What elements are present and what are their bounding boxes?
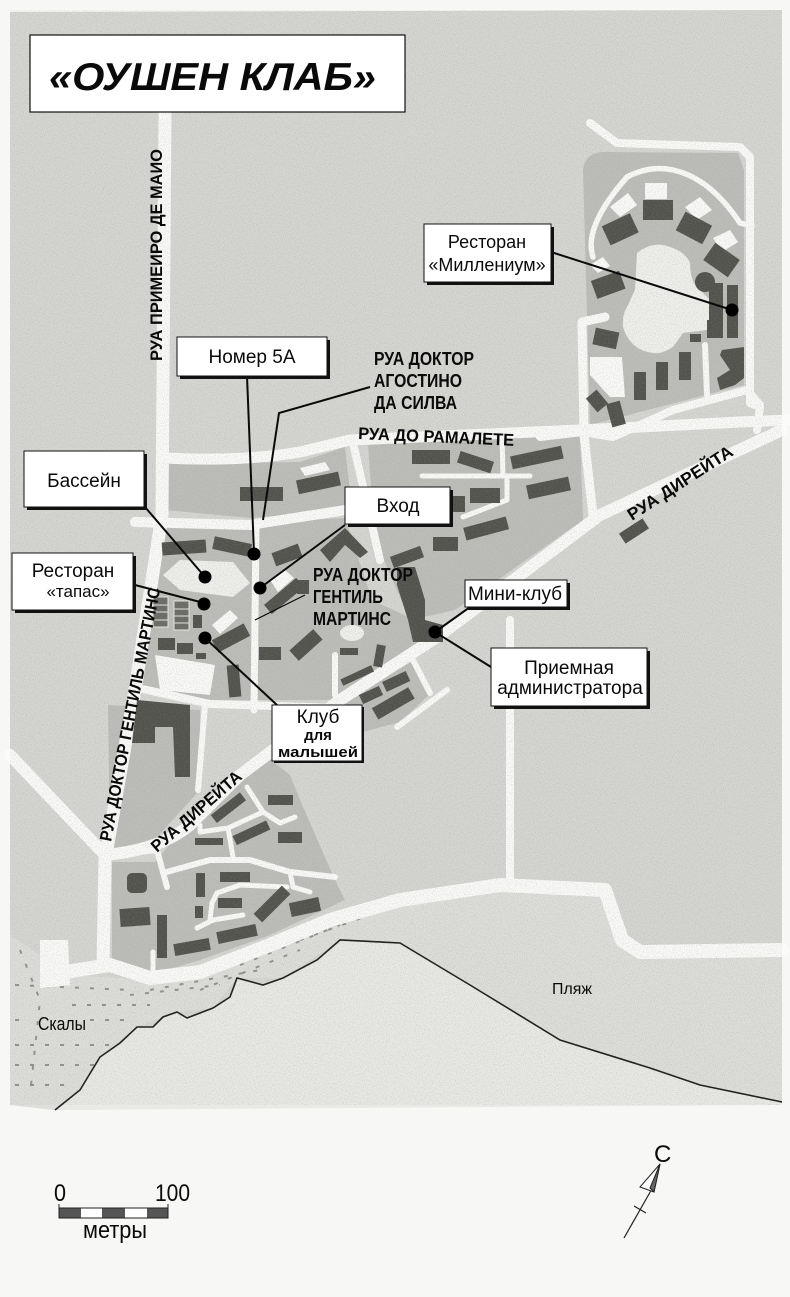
scale bar [54,1180,190,1244]
street: Rua Direita upper: РУА ДИРЕЙТА [624,442,736,524]
street labels [96,149,736,856]
street: Rua Doutor Gentil Martins [313,565,413,629]
callout: reception [491,648,650,709]
street: Rua Direita lower: РУА ДИРЕЙТА [147,767,246,856]
sea [55,940,782,1110]
callout: entrance: Вход [377,496,419,517]
scale bar: 0 [54,1180,66,1207]
buildings: tapas grid [153,597,189,630]
street: Rua Doutor Agostino da Silva [374,349,474,413]
callout: kids club [272,705,364,763]
leader lines [135,252,732,705]
coastline [55,940,782,1110]
street: Rua Doutor Gentil Martins: МАРТИНС [313,609,391,629]
rock speckles [15,915,370,1095]
callout: tapas restaurant: Ресторан [32,561,114,582]
callout: kids club: Клуб [297,707,339,728]
buildings: central resort [132,472,386,777]
buildings: lower quarter [119,792,321,958]
street: Rua Doutor Gentil Martins: РУА ДОКТОР [313,565,413,585]
callout: pool: Бассейн [47,471,121,492]
callout: pool [24,451,147,510]
label: rocks: Скалы [38,1014,86,1034]
callout: Millennium restaurant [424,224,554,285]
street: Rua Doutor Agostino da Silva: АГОСТИНО [374,371,462,391]
beach [340,885,782,1102]
callout: reception: администратора [497,678,643,699]
callout: entrance [345,487,453,527]
pools [163,245,717,641]
street: Rua Doutor Gentil Martins: ГЕНТИЛЬ [313,587,383,607]
rocks [10,905,400,1110]
north arrow [624,1141,671,1238]
callout: room 5A [177,337,330,379]
callout: tapas restaurant: «тапас» [46,582,110,601]
street: Rua do Ramalete: РУА ДО РАМАЛЕТЕ [358,424,515,450]
callout: kids club: малышей [278,744,358,761]
title [30,35,405,112]
callout: Millennium restaurant: Ресторан [448,232,526,252]
street: Rua Doutor Agostino da Silva: ДА СИЛВА [374,393,457,413]
white plots [40,183,738,988]
title: «ОУШЕН КЛАБ» [49,56,376,99]
street: Rua Doutor Agostino da Silva: РУА ДОКТОР [374,349,474,369]
north arrow: С [654,1141,671,1168]
scale bar: 100 [155,1180,190,1207]
callout: tapas restaurant [12,553,136,613]
callout: mini club [465,580,570,610]
label: beach: Пляж [552,981,592,998]
street: Rua Primeiro de Maio: РУА ПРИМЕИРО ДЕ МАИО [147,149,166,361]
callout: mini club: Мини-клуб [468,584,562,605]
callout: Millennium restaurant: «Миллениум» [428,255,546,275]
callout: reception: Приемная [524,658,614,679]
callout: kids club: для [304,727,332,744]
building blocks [108,152,744,975]
roads [10,112,790,978]
buildings [119,200,744,958]
street: Rua Doutor Gentil Martins vertical: РУА ДОКТОР ГЕНТИЛЬ МАРТИНС [96,586,164,843]
callout: room 5A: Номер 5А [208,347,296,368]
location dots [198,304,738,644]
scale bar: метры [83,1217,147,1244]
buildings: Ramalete quarter [359,446,649,720]
buildings: Millennium complex [586,200,744,427]
